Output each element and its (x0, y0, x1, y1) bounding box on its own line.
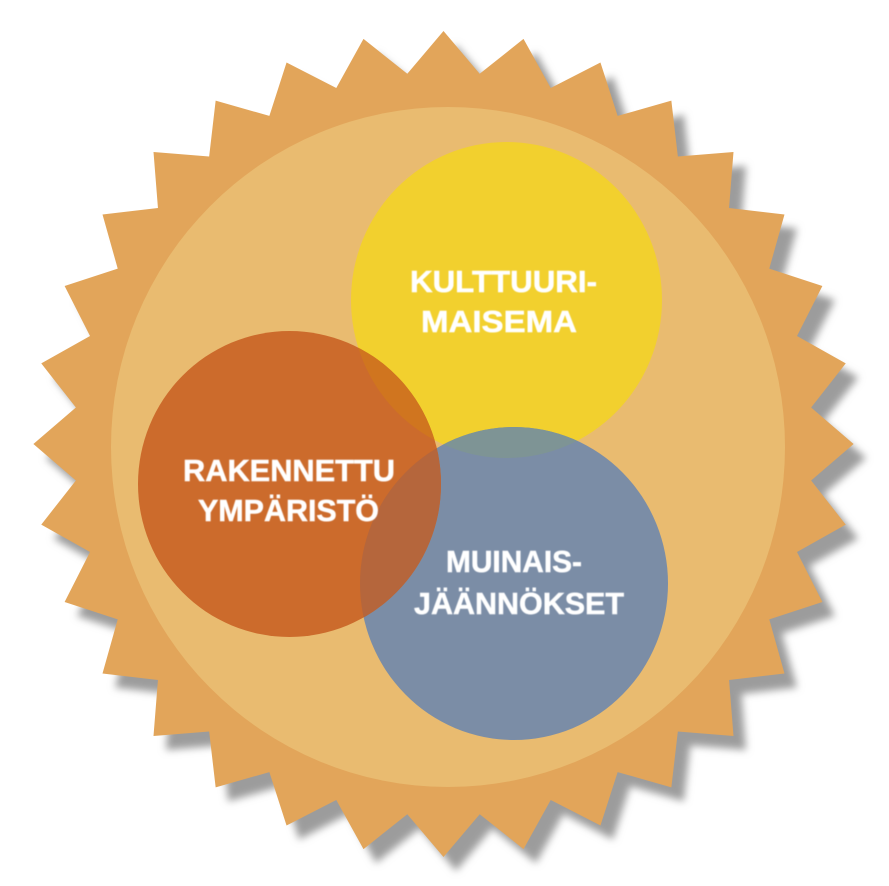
label: muinaisjäännökset: MUINAIS- (446, 544, 582, 579)
circle: rakennettu ympäristö (138, 331, 441, 637)
label: rakennettu ympäristö: YMPÄRISTÖ (198, 493, 379, 528)
inner disc (111, 107, 785, 787)
label: muinaisjäännökset: JÄÄNNÖKSET (414, 586, 624, 621)
circle: kulttuurimaisema (351, 142, 662, 458)
label: muinaisjäännökset (414, 544, 624, 621)
label: kulttuurimaisema (410, 264, 597, 339)
label: rakennettu ympäristö: RAKENNETTU (183, 453, 395, 488)
label: rakennettu ympäristö (183, 453, 395, 528)
overlap: yellow and blue (444, 427, 578, 458)
circle: muinaisjäännökset (360, 427, 668, 740)
label: kulttuurimaisema: KULTTUURI- (410, 264, 597, 299)
overlap: yellow and orange (358, 348, 434, 440)
label: kulttuurimaisema: MAISEMA (421, 304, 577, 339)
overlap: blue and orange (360, 448, 441, 618)
